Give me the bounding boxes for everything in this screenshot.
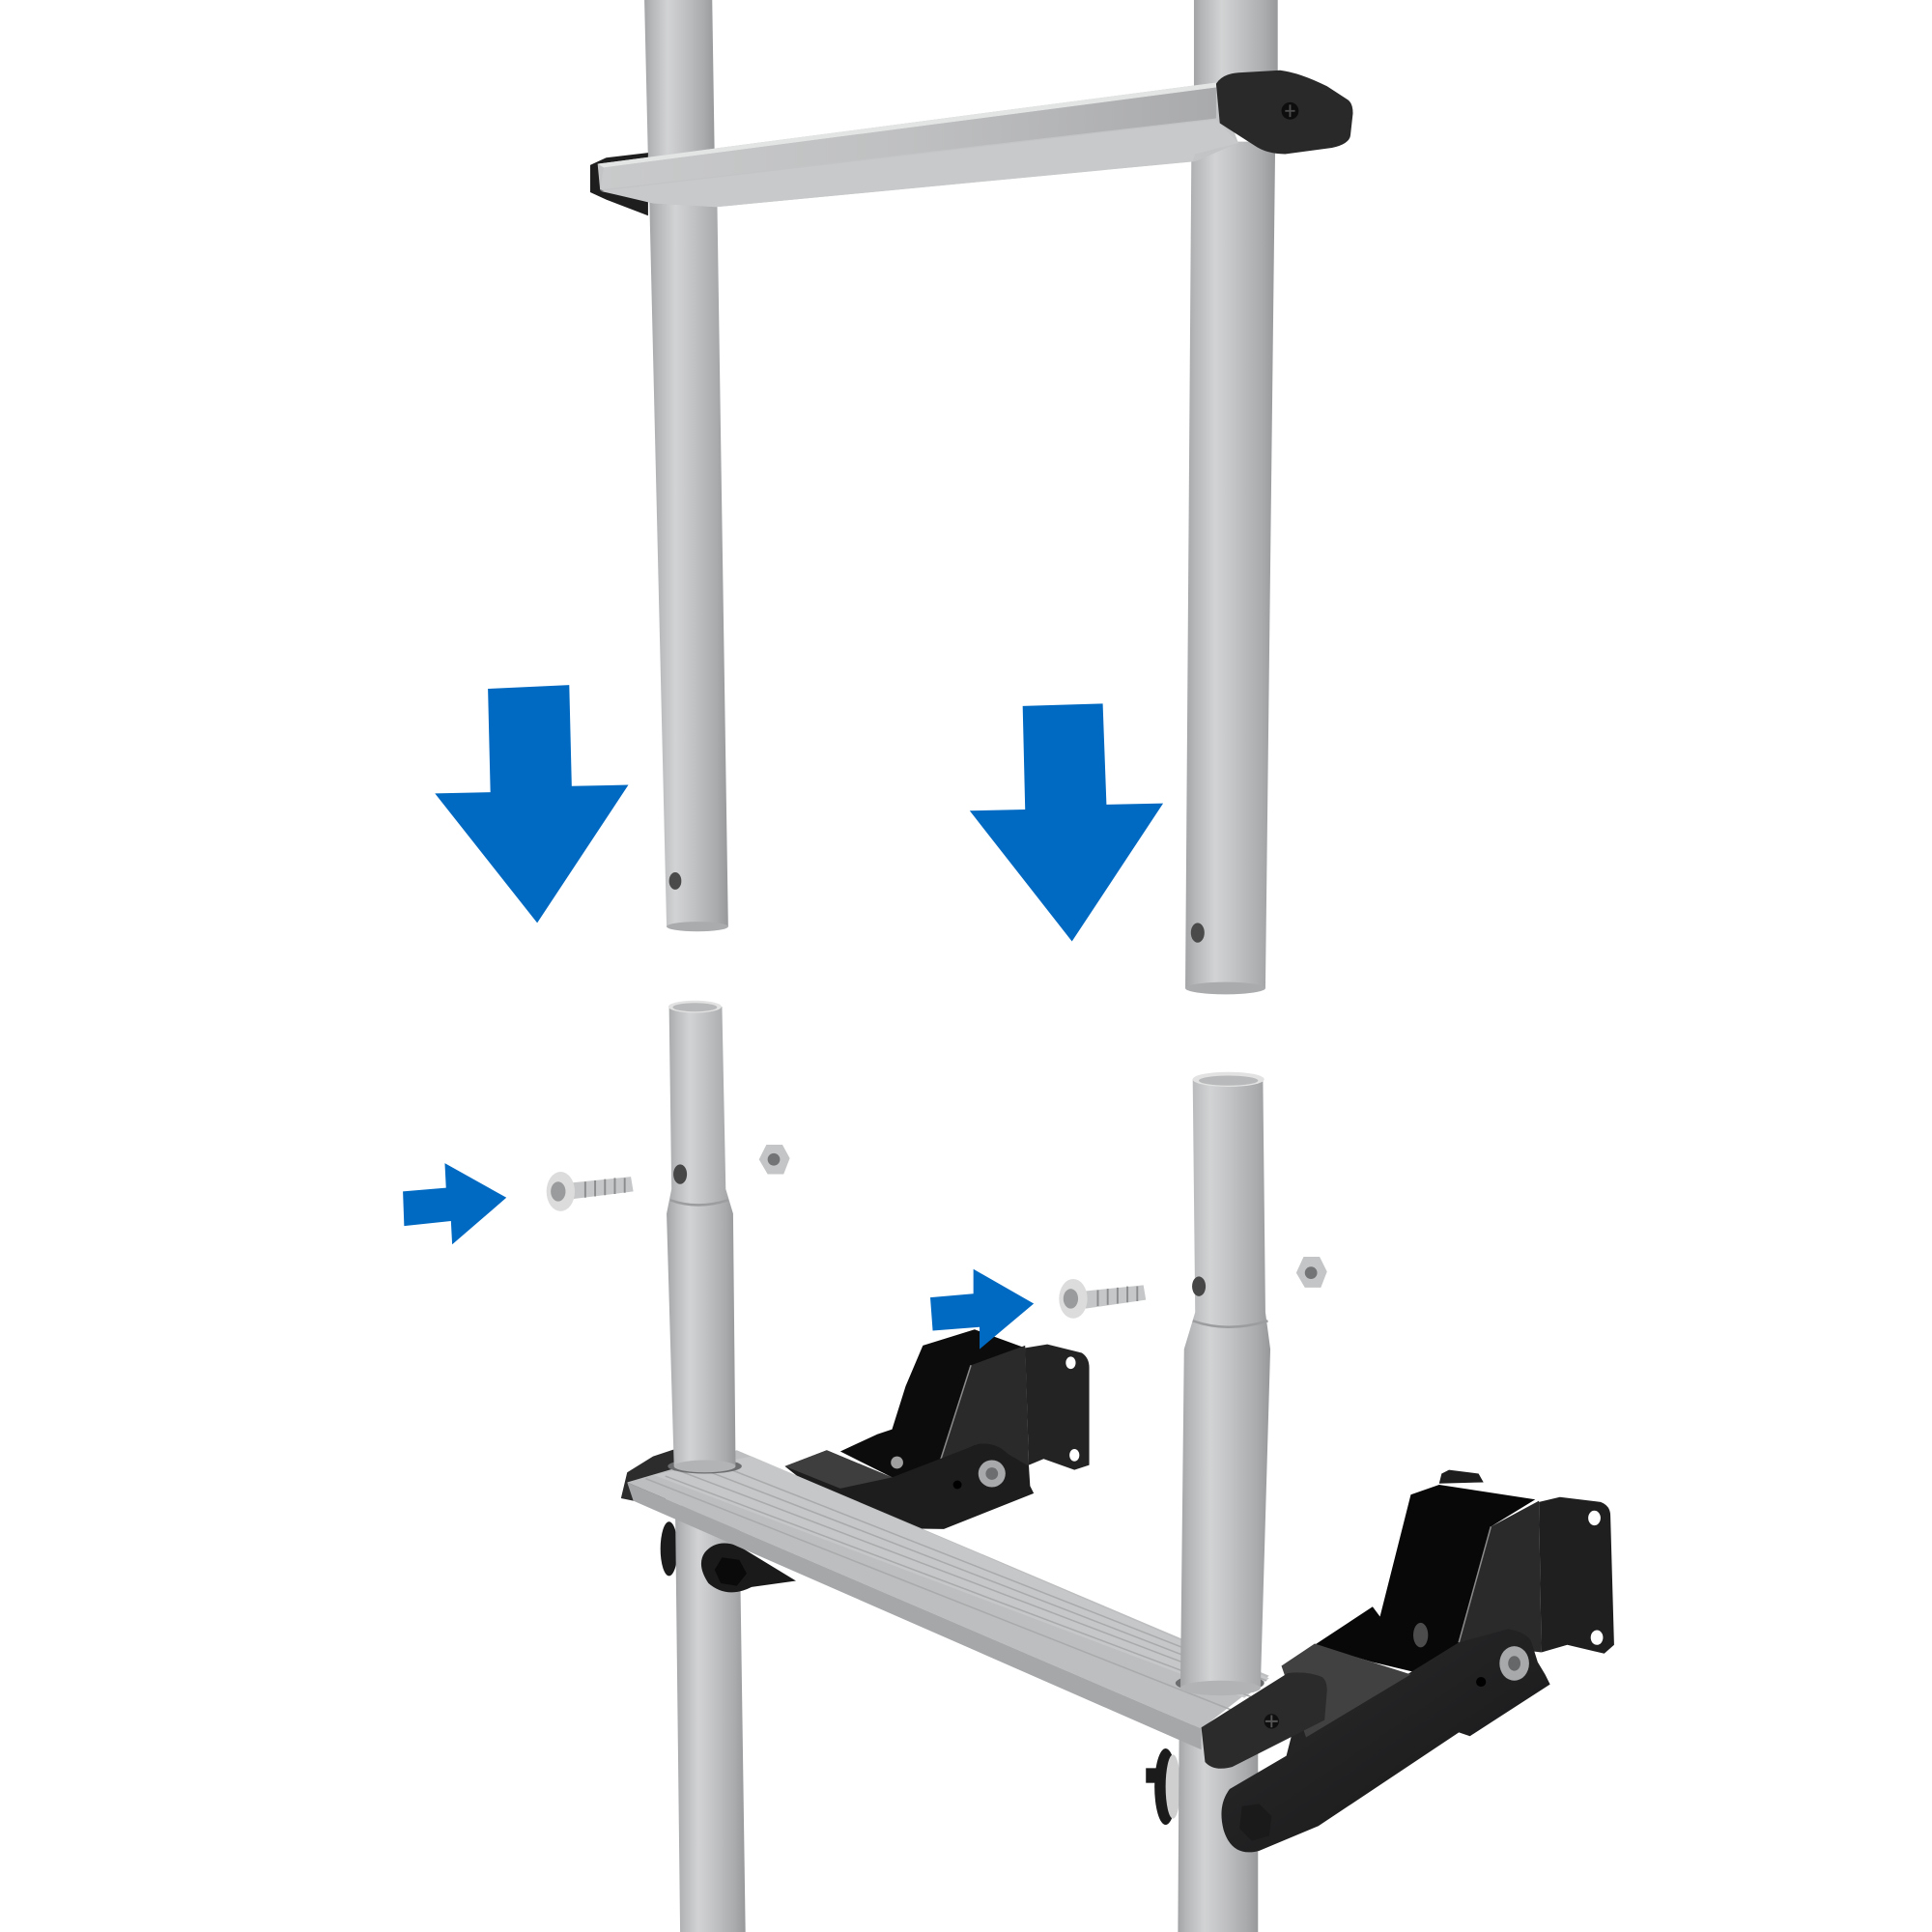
step end cap bbox=[1202, 1672, 1327, 1769]
screw right bbox=[1059, 1279, 1146, 1319]
step ribs bbox=[645, 1462, 1266, 1710]
arrow: large down right bbox=[970, 703, 1163, 941]
right bracket top tab bbox=[1439, 1470, 1484, 1484]
left lower mounting bracket bbox=[784, 1329, 1090, 1529]
arrow: small right right bbox=[930, 1269, 1034, 1350]
lower right tube section bbox=[1176, 1072, 1270, 1695]
right mounting bracket bbox=[1221, 1470, 1614, 1852]
upper left tube bbox=[644, 0, 728, 931]
back washer left bbox=[661, 1521, 678, 1576]
right bracket arm top bbox=[1282, 1644, 1410, 1737]
right bracket pivot washer bbox=[1499, 1646, 1529, 1681]
left lower bracket hub bbox=[701, 1543, 796, 1592]
right bracket bolt head bbox=[1239, 1804, 1271, 1841]
left lower tube bbox=[675, 1506, 746, 1932]
right bracket wall plate bbox=[1539, 1497, 1614, 1654]
lower left tube section bbox=[667, 1001, 742, 1474]
right bracket arm bbox=[1221, 1629, 1550, 1852]
upper rung bbox=[590, 71, 1353, 215]
back washer right bbox=[1146, 1748, 1180, 1825]
right lower tube bbox=[1178, 1725, 1258, 1932]
upper right tube bbox=[1185, 0, 1278, 994]
nut left bbox=[759, 1145, 790, 1175]
right bracket channel bbox=[1315, 1485, 1535, 1674]
arrow: large down left bbox=[435, 685, 629, 923]
arrow: small right left bbox=[403, 1163, 506, 1244]
rung end cap bbox=[1216, 71, 1353, 154]
lower ladder tubes below the step bbox=[661, 1506, 1258, 1932]
screw left bbox=[547, 1172, 634, 1211]
upper ladder section bbox=[590, 0, 1353, 994]
lower step bbox=[621, 1449, 1269, 1749]
right bracket side plate bbox=[1459, 1501, 1542, 1652]
nut right bbox=[1296, 1257, 1327, 1288]
